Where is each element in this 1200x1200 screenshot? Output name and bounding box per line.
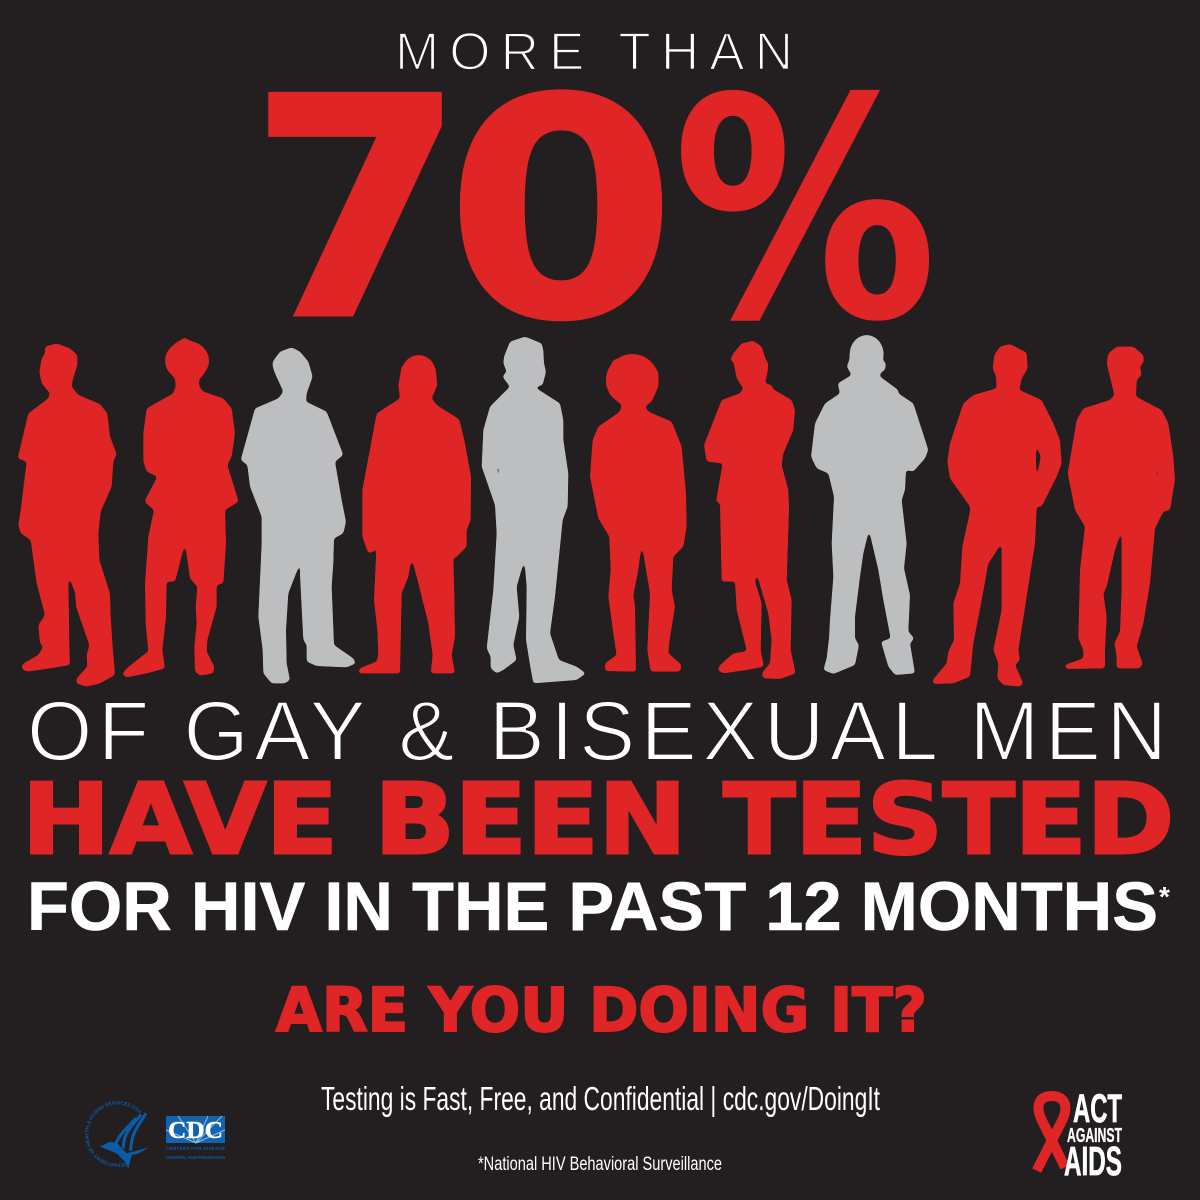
man 6 (red) [590, 354, 687, 672]
logo: CDC: CONTROL AND PREVENTION [166, 1155, 225, 1160]
logo: Act Against AIDS: AGAINST [1067, 1125, 1122, 1147]
logo: HHS seal: DEPARTMENT OF HEALTH & HUMAN SERVICES USA [84, 1101, 142, 1167]
text: for HIV in the past 12 months: FOR HIV IN THE PAST 12 MONTHS [27, 868, 1158, 945]
logo: CDC [166, 1116, 225, 1160]
text: testing details: Testing is Fast, Free, and Confidential | cdc.gov/DoingIt [321, 1080, 880, 1117]
man 1 (red) [18, 343, 117, 687]
man 10 (red) [1064, 347, 1175, 669]
icon: red ribbon [1037, 1096, 1065, 1171]
man 7 (red) [704, 341, 796, 679]
man 5 (grey) [482, 337, 586, 683]
man 4 (red) [358, 355, 471, 673]
man 8 (grey) [811, 335, 928, 675]
footnote asterisk: * [1159, 881, 1170, 912]
logo: Act Against AIDS [1037, 1087, 1122, 1184]
logo: CDC: CENTERS FOR DISEASE [166, 1146, 225, 1151]
silhouettes: row of ten men [18, 335, 1175, 687]
text: have been tested: HAVE BEEN TESTED [22, 763, 1174, 876]
call to action: are you doing it: ARE YOU DOING IT? [276, 975, 927, 1046]
logo: CDC: CDC [168, 1118, 223, 1144]
man 2 (red) [122, 337, 239, 677]
big statistic: 70% [249, 33, 937, 388]
heading: more than: MORE THAN [395, 22, 793, 82]
big statistic: 70%: % [673, 34, 937, 388]
text: of gay & bisexual men: OF GAY & BISEXUAL MEN [27, 684, 1167, 778]
man 9 (red) [933, 344, 1062, 687]
man 3 (grey) [241, 347, 356, 683]
big statistic: 70%: 0 [445, 34, 677, 388]
logo: Act Against AIDS: ACT [1073, 1087, 1122, 1131]
logo: Act Against AIDS: AIDS [1064, 1138, 1122, 1184]
footnote: source: *National HIV Behavioral Surveillance [478, 1154, 722, 1175]
big statistic: 70%: 7 [249, 33, 465, 387]
